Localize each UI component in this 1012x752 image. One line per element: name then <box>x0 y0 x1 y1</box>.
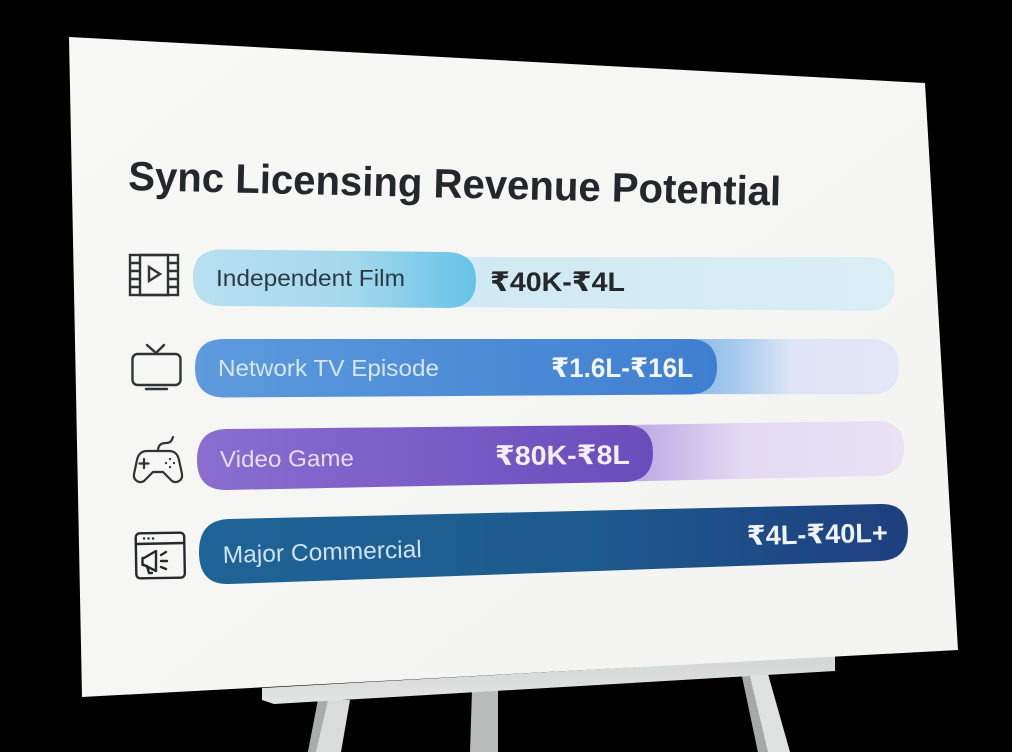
value: ₹4L-₹40L+ <box>746 518 888 551</box>
fill bar <box>197 425 653 490</box>
title: Sync Licensing Revenue Potential <box>128 153 782 214</box>
label: Independent Film <box>216 265 405 291</box>
fill bar <box>195 339 717 398</box>
board <box>69 37 958 697</box>
fill bar <box>193 250 476 308</box>
icon: advertising megaphone window <box>136 533 185 578</box>
value: ₹1.6L-₹16L <box>551 353 693 383</box>
track <box>450 257 895 311</box>
row: Independent Film <box>130 250 895 311</box>
label: Video Game <box>220 445 354 472</box>
label: Major Commercial <box>222 536 422 569</box>
label: Network TV Episode <box>218 355 439 381</box>
row: Major Commercial <box>136 504 908 584</box>
value: ₹40K-₹4L <box>490 267 625 297</box>
track <box>690 339 899 394</box>
track <box>625 421 904 482</box>
row: Video Game <box>134 421 904 490</box>
fill bar <box>199 504 908 584</box>
icon: film strip <box>130 255 178 295</box>
value: ₹80K-₹8L <box>495 440 630 471</box>
row: Network TV Episode <box>132 339 899 398</box>
icon: television <box>132 345 180 389</box>
icon: game controller <box>134 437 182 482</box>
easel stand <box>262 656 835 752</box>
